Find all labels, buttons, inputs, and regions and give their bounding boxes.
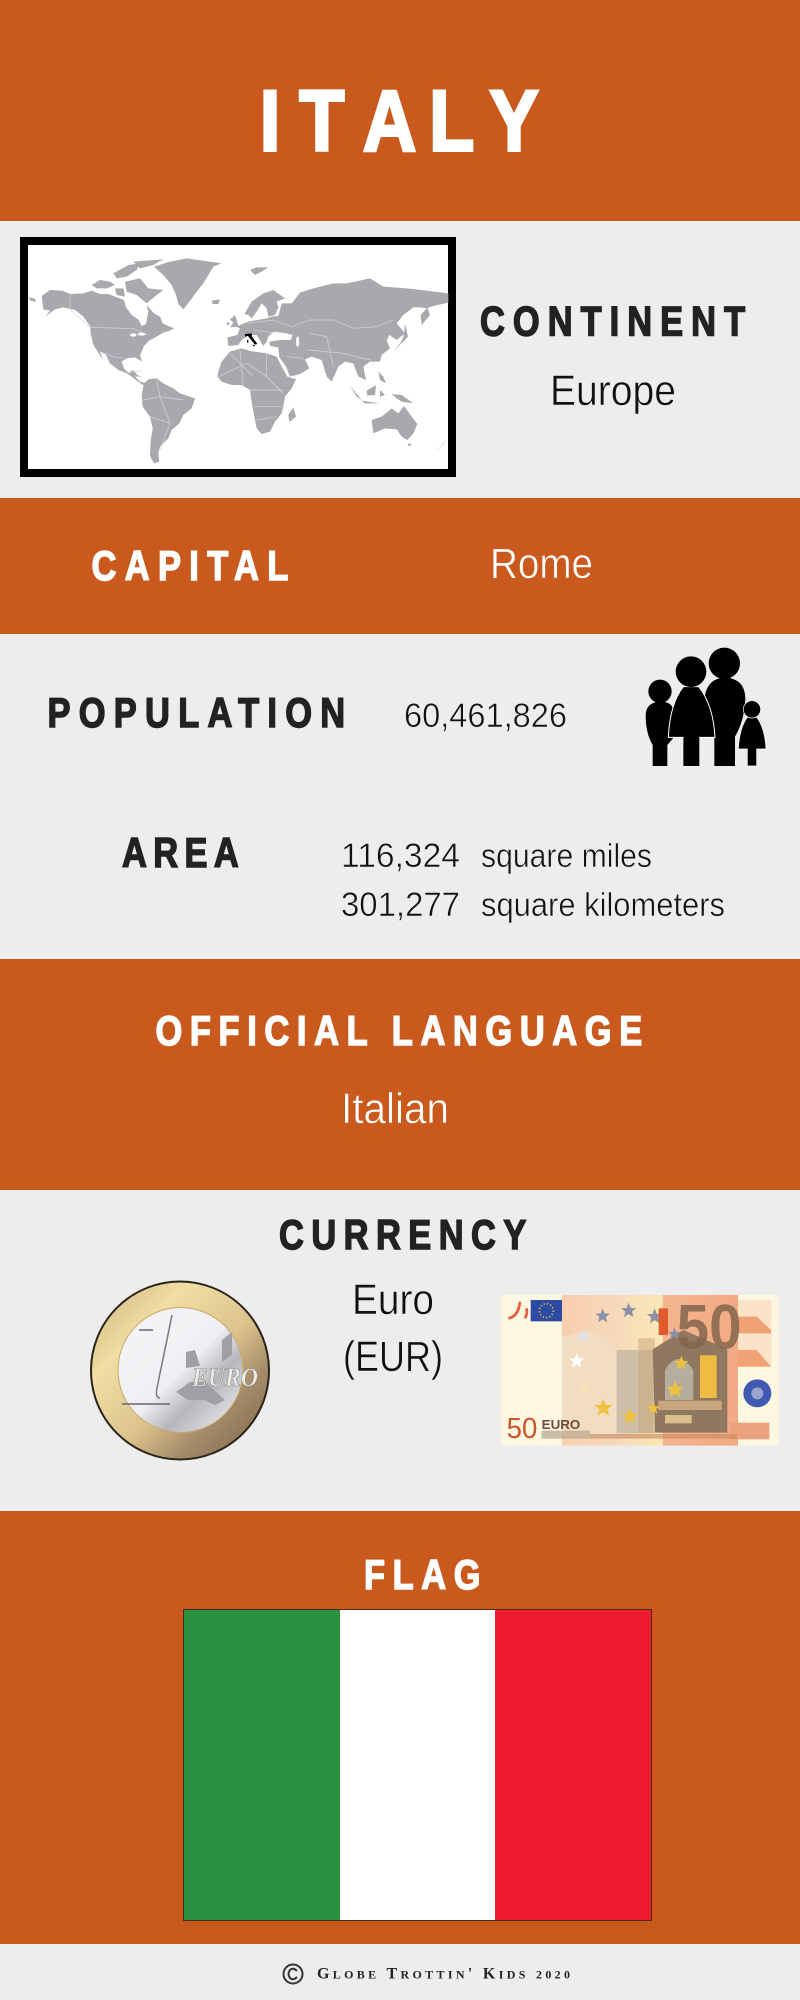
- panel: capital: [0, 498, 800, 634]
- world map: [24, 241, 452, 473]
- title banner: [0, 0, 800, 221]
- icon: euro banknote: 50: [507, 1413, 537, 1445]
- value: Euro: Euro: [352, 1276, 434, 1324]
- heading: capital: CAPITAL: [92, 543, 297, 590]
- heading: currency: CURRENCY: [279, 1212, 534, 1259]
- panel: area: square kilometers: [481, 886, 725, 923]
- value: EUR: (EUR): [343, 1333, 443, 1381]
- value: population: 60,461,826: [404, 697, 567, 735]
- icon: euro coin: [91, 1282, 269, 1460]
- icon: euro banknote: [501, 1292, 779, 1446]
- icon: copyright: [284, 1964, 302, 1984]
- value: Europe: Europe: [550, 367, 676, 415]
- credit text: G LOBE T ROTTIN' K IDS 2020: [317, 1966, 570, 1982]
- value: square miles: 116,324: [341, 837, 460, 875]
- Italy highlighted: [245, 333, 257, 347]
- icon: euro banknote: EURO: [542, 1418, 580, 1432]
- panel: continent: [24, 241, 753, 473]
- heading: continent: CONTINENT: [480, 298, 753, 345]
- panel: area: [122, 830, 725, 924]
- heading: area: AREA: [122, 830, 245, 877]
- panel: flag: [0, 1511, 800, 1944]
- icon: euro coin: EURO: [191, 1363, 258, 1392]
- heading: population: POPULATION: [48, 690, 353, 737]
- panel: currency: [91, 1212, 779, 1460]
- value: square kilometers: 301,277: [341, 886, 460, 924]
- heading: flag: FLAG: [364, 1552, 488, 1599]
- value: Rome: Rome: [490, 540, 593, 588]
- value: Italian: Italian: [341, 1085, 449, 1133]
- footer credit: [284, 1964, 570, 1984]
- panel: official language: [0, 959, 800, 1190]
- panel: population: [48, 648, 766, 766]
- icon: euro banknote: 50: [677, 1292, 742, 1362]
- icon: family: [646, 648, 766, 766]
- title: ITALY: [260, 72, 539, 169]
- panel: area: square miles: [481, 837, 652, 874]
- heading: official language: OFFICIAL LANGUAGE: [156, 1008, 650, 1055]
- flag of Italy: [183, 1609, 652, 1921]
